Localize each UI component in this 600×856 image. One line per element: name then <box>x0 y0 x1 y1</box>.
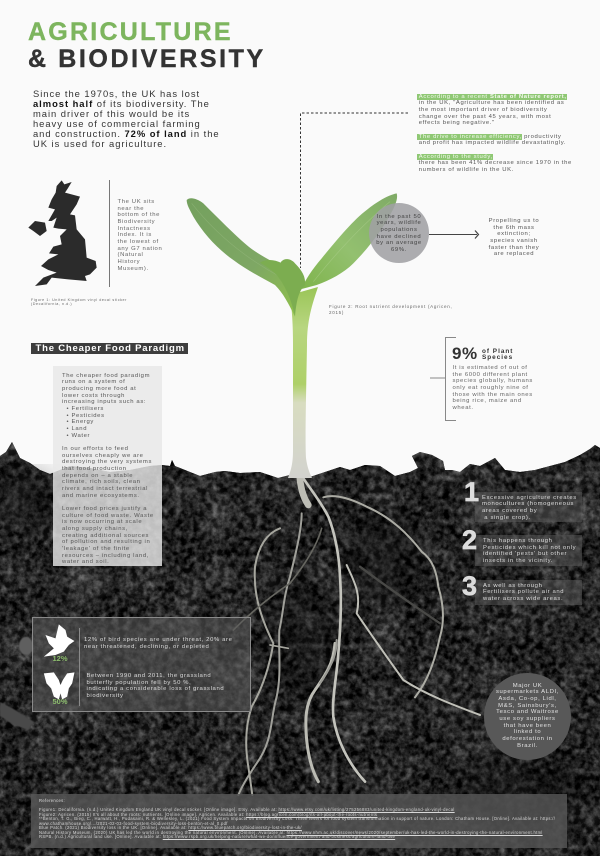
cheaper food panel: depends on – a stable <box>62 473 133 479</box>
plant species bracket <box>430 337 456 421</box>
extinction text: species vanish <box>490 238 538 244</box>
cheaper food panel: water and soil. <box>62 559 109 565</box>
map divider <box>108 180 110 287</box>
cheaper food panel: • Pesticides <box>67 413 105 419</box>
references: **Benton, T. G., Bieg, C., Harwatt, H., Pudasaini, R. & Wellesley, L. (2021) Food System Impacts on Biodiversity Loss: Three levers for food system transformation in support of nature. London: Chatham House. [Online]. Available at: https:// <box>39 816 555 821</box>
cheaper food panel: ourselves cheaply we are <box>62 453 144 459</box>
cheaper food panel: increasing inputs such as: <box>62 399 146 405</box>
impact 3 panel: Fertilisers pollute air and <box>483 589 564 595</box>
figure 1 caption <box>31 298 127 306</box>
intro text: UK is used for agriculture. <box>33 138 167 149</box>
figure 2 caption: 2015) <box>329 310 344 314</box>
supermarkets circle: use soy suppliers <box>499 716 556 722</box>
State of Nature text: change over the past 45 years, with most <box>419 114 551 120</box>
State of Nature text: and profit has impacted wildlife devastatingly. <box>419 140 566 146</box>
stats divider <box>78 628 80 706</box>
plant species text: It is estimated of out of <box>452 365 528 371</box>
cheaper food panel: of pollution and resulting in <box>62 539 150 545</box>
9 percent figure: 9% <box>452 344 478 363</box>
icon: butterfly <box>43 672 74 699</box>
State of Nature text: effects being negative." <box>419 120 495 126</box>
intro text: Since the 1970s, the UK has lost <box>33 88 200 99</box>
cheaper food panel: and marine ecosystems. <box>62 493 140 499</box>
supermarkets circle: Major UK <box>513 682 542 688</box>
figure 2 caption: Figure 2: Root nutrient development (Agricen, <box>329 304 452 309</box>
cheaper food panel: resources – including land, <box>62 553 149 559</box>
plant species text: being rice, maize and <box>452 398 522 404</box>
arrow <box>429 230 480 239</box>
impact 1 panel: monocultures (homogeneous <box>482 501 574 507</box>
title: & BIODIVERSITY <box>28 44 266 72</box>
UK index text <box>118 199 162 272</box>
references: RSPB. (n.d.) Agricultural land use. [Online]. Available at: https://www.rspb.org.uk/helping-nature/what-we-do/influence-government-and-business/agriculture-land-use <box>39 834 395 839</box>
plant species stat <box>452 344 513 363</box>
dotted leader line <box>300 113 408 268</box>
supermarkets circle: linked to <box>514 729 541 735</box>
wildlife decline circle: years, wildlife <box>377 220 421 226</box>
impact 2 panel: This happens through <box>483 538 553 544</box>
impact 3 panel: As well as through <box>483 582 542 588</box>
cheaper food panel: In our efforts to feed <box>62 446 128 452</box>
figure 1 caption: (Decalifornia, n.d.) <box>31 302 72 306</box>
State of Nature text: numbers of wildlife in the UK. <box>419 167 514 173</box>
references: References: <box>39 798 65 803</box>
extinction text: the 6th mass <box>493 225 535 231</box>
impact 2 panel <box>475 535 582 566</box>
bird text: near threatened, declining, or depleted <box>84 644 209 650</box>
UK index text: The UK sits <box>118 199 155 205</box>
impact 1 panel: Excessive agriculture creates <box>482 494 577 500</box>
butterfly text: Between 1990 and 2011, the grassland <box>86 673 211 679</box>
centre leaf <box>260 259 305 317</box>
impact 2 panel: insects in the vicinity. <box>483 558 553 564</box>
wildlife decline circle: 69%. <box>391 247 407 253</box>
number 1: 1 <box>464 477 479 507</box>
references: www.chathamhouse.org/.../2021-02-03-food-system-biodiversity-loss-benton-et-al_0.pdf <box>39 820 228 826</box>
bird text: 12% of bird species are under threat, 20% are <box>84 637 233 643</box>
State of Nature text: in the UK, "Agriculture has been identified as <box>419 100 564 106</box>
impact 1 panel: areas covered by <box>482 508 537 514</box>
figure 1 caption: Figure 1: United Kingdom vinyl decal sticker <box>31 298 127 302</box>
of plant species label: of Plant <box>482 348 513 355</box>
UK index text: (Natural <box>118 252 144 258</box>
cheaper food panel: climate, rich soils, clean <box>62 479 141 485</box>
cheaper food panel: that food production <box>62 466 127 472</box>
UK index text: bottom of the <box>118 212 160 218</box>
supermarkets circle <box>484 673 571 760</box>
UK index text: Index. It is <box>118 232 152 238</box>
wildlife decline circle: In the past 50 <box>377 214 421 220</box>
butterfly text: indicating a considerable loss of grassland <box>86 686 224 692</box>
plant species text: the 6000 different plant <box>452 372 528 378</box>
wildlife decline circle: have declined <box>377 234 421 240</box>
cheaper food panel: runs on a system of <box>62 379 125 385</box>
12 percent label: 12% <box>52 654 68 663</box>
cheaper food heading: The Cheaper Food Paradigm <box>36 343 185 354</box>
intro text: heavy use of commercial farming <box>33 118 201 129</box>
State of Nature text: According to the study, <box>419 154 493 160</box>
extinction text: are replaced <box>494 251 534 257</box>
stem <box>288 287 318 478</box>
cheaper food panel: • Fertilisers <box>67 406 104 412</box>
50 percent label: 50% <box>52 697 68 706</box>
intro text <box>33 88 220 149</box>
cheaper food panel: Lower food prices justify a <box>62 506 147 512</box>
title <box>28 18 266 72</box>
cheaper food panel: creating additional sources <box>62 533 149 539</box>
right leaf <box>302 193 397 289</box>
intro text: main driver of this would be its <box>33 108 190 119</box>
of plant species label: Species <box>482 354 513 361</box>
UK index text: any G7 nation <box>118 246 162 252</box>
supermarkets circle: supermarkets ALDI, <box>496 689 559 695</box>
cheaper food panel: destroying the very systems <box>62 459 152 465</box>
supermarkets circle: M&S, Sainsbury's, <box>498 703 557 709</box>
left leaf <box>187 198 295 317</box>
extinction text: Propelling us to <box>489 218 539 224</box>
cheaper food panel: along supply chains, <box>62 526 128 532</box>
wildlife stats panel <box>32 617 250 712</box>
State of Nature text: the most important driver of biodiversity <box>419 107 547 113</box>
bird text <box>84 637 233 650</box>
impact 3 <box>462 571 582 605</box>
plant species text: those with the main ones <box>452 392 533 398</box>
seedling leaves <box>187 193 397 317</box>
UK index text: the lowest of <box>118 239 159 245</box>
State of Nature text: The drive to increase efficiency, productivity <box>419 134 561 140</box>
cheaper food panel: 'leakage' of the finite <box>62 546 130 552</box>
UK index text: Intactness <box>118 226 151 232</box>
cheaper food panel: • Water <box>67 433 90 439</box>
references: Figure1: Decalifornia. (n.d.) United Kingdom England UK vinyl decal sticker. [Online image]. Etsy. Available at: https://www.etsy.com/uk/listing/275256883/united-kingdom-england-uk-vinyl-decal <box>39 807 455 812</box>
plant species text <box>452 365 533 411</box>
cheaper food panel: • Energy <box>67 419 94 425</box>
impact 2 panel: identified 'pests' but other <box>483 551 567 557</box>
plant species text: only eat roughly nine of <box>452 385 529 391</box>
references: Blue Patch. (2021) Biodiversity loss in the UK. [Online]. Available at: https://www.bluepatch.org/biodiversity-lost-in-the-uk/ <box>39 825 302 830</box>
supermarkets circle: deforestation in <box>502 736 553 742</box>
roots <box>233 472 480 795</box>
extinction text: faster than they <box>489 245 539 251</box>
butterfly text <box>86 673 224 699</box>
wildlife decline circle <box>369 203 429 263</box>
references: Natural History Museum. (2020) UK has led the world in destroying the natural environment. [Online]. Available at: https://www.nhm.ac.uk/discover/news/2020/september/uk-has-led-the-world-in-destroying-the-natural-environment.html <box>39 830 543 834</box>
cheaper food panel: The cheaper food paradigm <box>62 372 150 378</box>
extinction text: extinction; <box>497 231 531 237</box>
UK map <box>28 180 97 286</box>
number 2: 2 <box>462 525 477 555</box>
cheaper food panel: rivers and intact terrestrial <box>62 486 148 492</box>
stats icons <box>44 624 74 699</box>
cheaper food panel: producing more food at <box>62 386 136 392</box>
cheaper food panel: is now occurring at scale <box>62 519 142 525</box>
figure 2 caption <box>329 304 452 315</box>
impact 1 panel: a single crop). <box>484 515 531 521</box>
extinction text <box>488 218 539 257</box>
wildlife decline circle: by an average <box>376 240 422 246</box>
number 3: 3 <box>462 571 477 601</box>
UK index text: History <box>118 259 140 265</box>
UK index text: Biodiversity <box>118 219 155 225</box>
UK index text: near the <box>118 206 144 212</box>
soil <box>0 442 600 856</box>
UK index text: Museum). <box>118 266 149 272</box>
supermarkets circle: that have been <box>504 723 551 729</box>
wildlife decline circle: populations <box>380 227 418 233</box>
of plant species label <box>482 348 513 361</box>
plant species text: species globally, humans <box>452 378 533 384</box>
references: Figure2: Agricen. (2015) It's all about the roots: nutrients. [Online image]. Agricen. Available at: https://blog.agricen.com/blog/its-all-about-the-roots-nutrients <box>39 812 377 816</box>
plant species text: wheat. <box>452 405 474 411</box>
title: AGRICULTURE <box>28 18 233 46</box>
intro text: and construction. 72% of land in the <box>33 128 220 139</box>
State of Nature text: there has been 41% decrease since 1970 in the <box>419 160 572 166</box>
State of Nature text <box>417 94 572 173</box>
icon: bird <box>43 624 74 657</box>
cheaper food panel <box>52 366 162 566</box>
supermarkets circle: Asda, Co-op, Lidl, <box>498 696 557 702</box>
impact 3 panel <box>475 580 582 605</box>
impact 2 <box>462 525 582 566</box>
butterfly text: butterfly population fell by 50 %, <box>86 680 191 686</box>
impact 2 panel: Pesticides which kill not only <box>483 545 576 551</box>
impact 1 panel <box>475 492 582 522</box>
cheaper food panel: culture of food waste. Waste <box>62 513 154 519</box>
cheaper food panel: • Land <box>67 426 87 432</box>
supermarkets circle: Tesco and Waitrose <box>496 709 559 715</box>
butterfly text: biodiversity <box>86 693 124 699</box>
impact 3 panel: water across wide areas. <box>483 596 563 602</box>
intro text: almost half of its biodiversity. The <box>33 98 210 109</box>
references <box>31 794 567 848</box>
supermarkets circle: Brazil. <box>517 743 538 749</box>
cheaper food panel: lower costs through <box>62 393 125 399</box>
State of Nature text: According to a recent State of Nature report, <box>419 94 567 100</box>
impact 1 <box>464 477 582 522</box>
